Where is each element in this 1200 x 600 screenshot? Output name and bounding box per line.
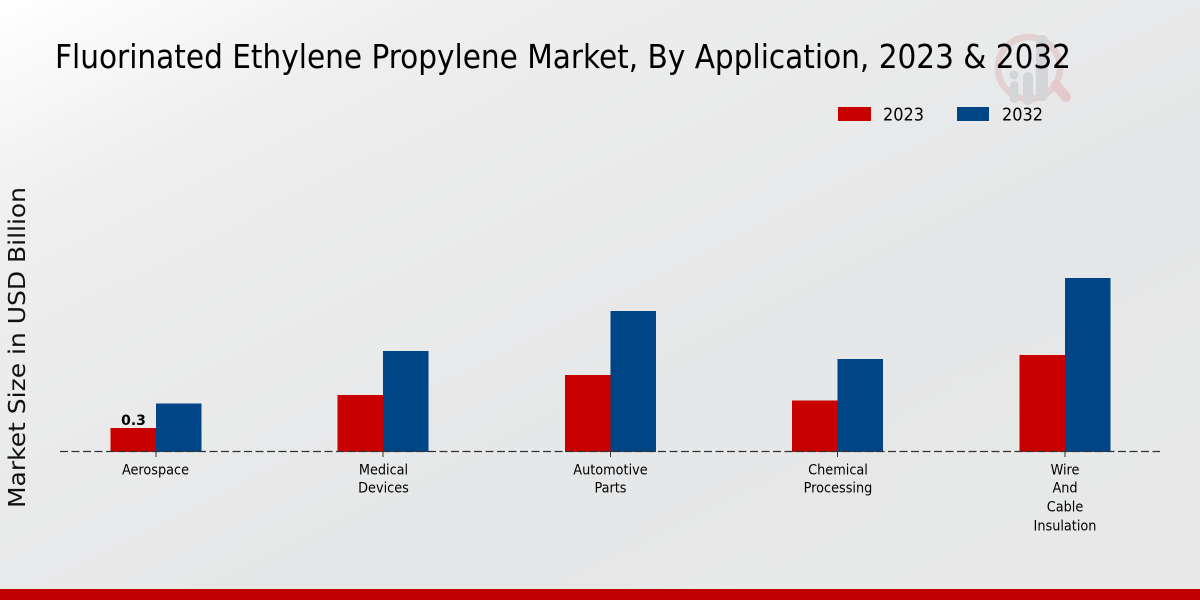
label: Wire And Cable Insulation: Cable	[1047, 500, 1083, 516]
x-axis baseline	[60, 450, 1160, 452]
bars: Aerospace	[110, 404, 202, 452]
label: Aerospace: Aerospace	[122, 462, 189, 478]
legend item: 2023	[838, 104, 924, 126]
label: Chemical Processing: Chemical	[808, 462, 868, 478]
label: Chemical Processing: Processing	[804, 480, 872, 496]
value label: 0.3: 0.3	[121, 413, 146, 429]
y-axis label: Market Size in USD Billion	[3, 187, 31, 508]
legend	[838, 104, 1043, 126]
icon: watermark logo	[998, 35, 1066, 105]
bar chart	[60, 278, 1160, 457]
legend item: 2032: 2032	[1002, 104, 1043, 126]
bars: Automotive Parts	[565, 311, 656, 452]
label: Medical Devices: Medical	[359, 462, 408, 478]
label: Medical Devices: Devices	[358, 480, 409, 496]
label: Automotive Parts: Automotive	[573, 462, 648, 478]
bars: Medical Devices	[338, 351, 428, 452]
label: Wire And Cable Insulation: And	[1052, 480, 1078, 496]
x-axis labels	[122, 462, 1096, 534]
legend item: 2032	[957, 104, 1043, 126]
bars: Wire And Cable Insulation	[1020, 278, 1110, 452]
footer bar	[0, 589, 1200, 600]
label: Wire And Cable Insulation: Insulation	[1034, 518, 1096, 534]
title: Fluorinated Ethylene Propylene Market, By Application, 2023 & 2032	[55, 37, 1071, 76]
legend item: 2023: 2023	[883, 104, 924, 126]
bars: Chemical Processing	[792, 359, 883, 452]
label: Automotive Parts: Parts	[594, 480, 627, 496]
label: Wire And Cable Insulation: Wire	[1051, 462, 1080, 478]
